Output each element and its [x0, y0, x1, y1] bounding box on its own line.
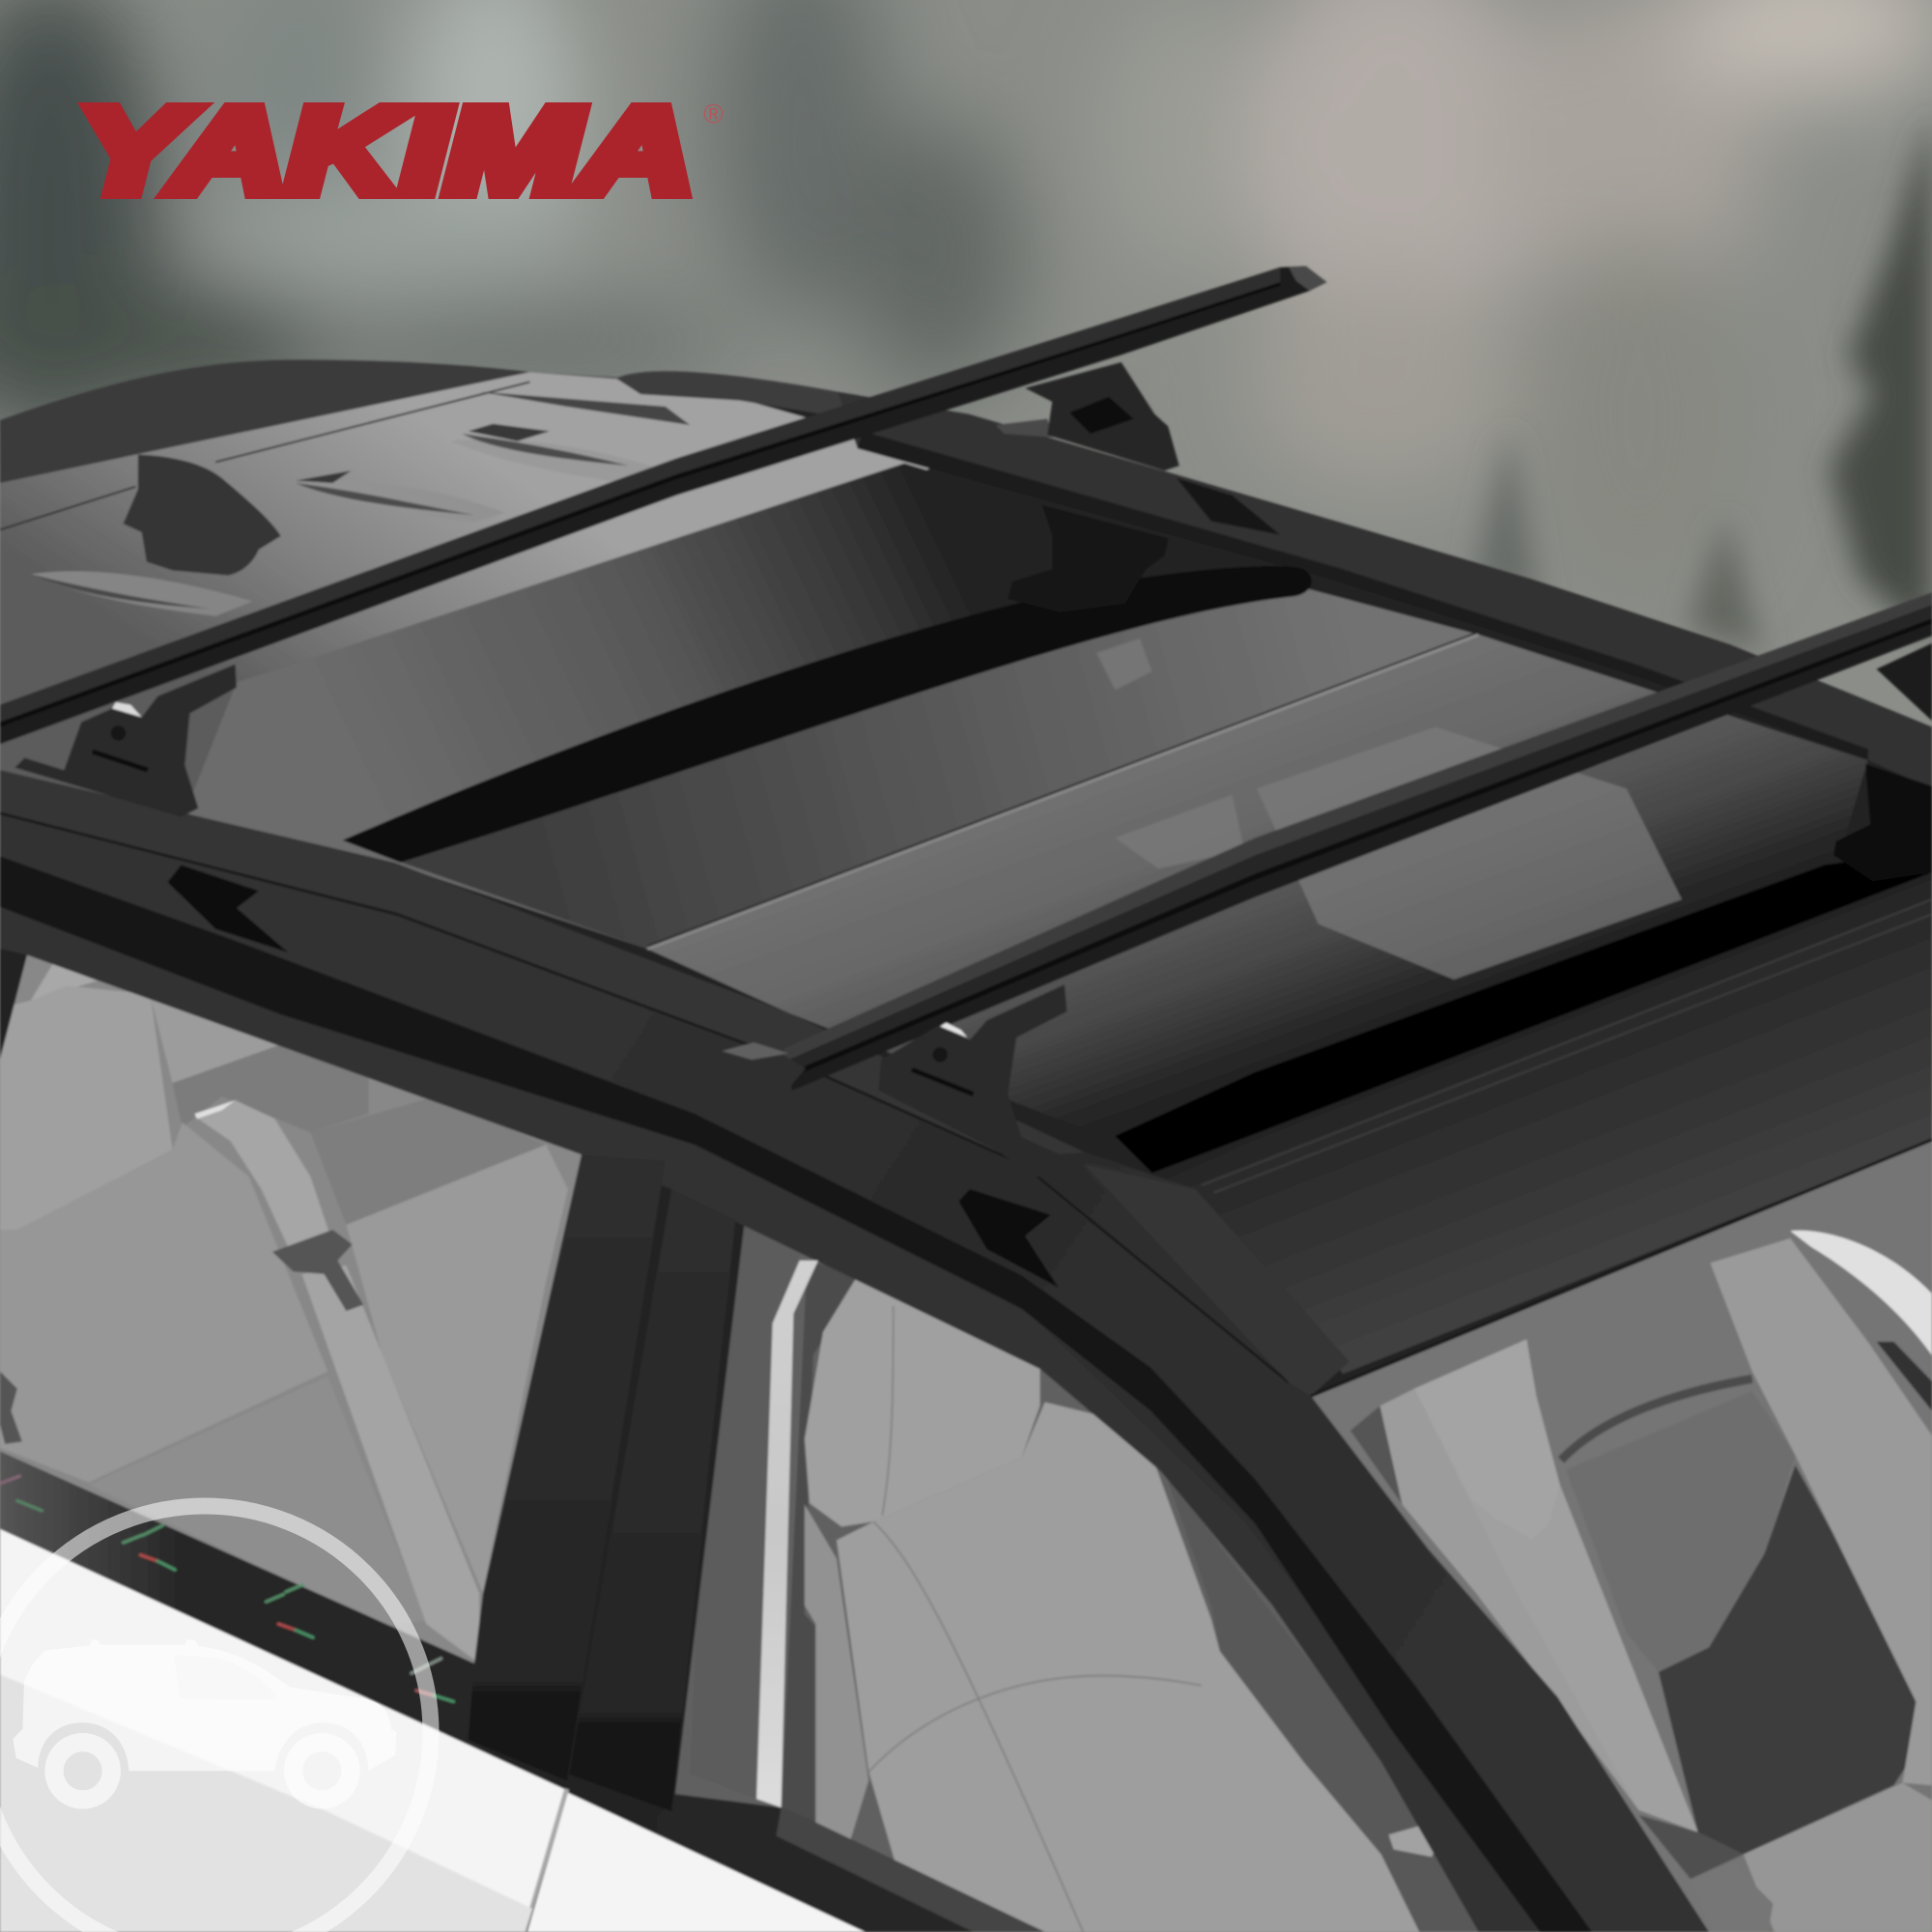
- b pillar rear: [469, 1154, 666, 1780]
- white car body front door: [527, 1793, 865, 1932]
- brand logo: ®: [703, 99, 724, 129]
- brand logo: YAKIMA: [77, 84, 694, 218]
- body crease shade: [0, 1674, 532, 1932]
- sill light band: [777, 1807, 1045, 1932]
- side reflection rear: [167, 865, 288, 952]
- rail highlight: [0, 770, 1084, 1158]
- right far tower: [1877, 643, 1932, 721]
- roof seam line: [0, 382, 529, 529]
- sill colour specks: [0, 1476, 453, 1701]
- front door white strip: [756, 1261, 818, 1807]
- crossbar rear: [0, 267, 1327, 744]
- roof reflection streaks: [31, 392, 690, 616]
- front roof panel: [1164, 880, 1932, 1374]
- lower trim band: [0, 907, 1543, 1932]
- rear window: [0, 955, 582, 1663]
- roof side panel: [1084, 1164, 1350, 1396]
- far side roof rail: [838, 392, 1932, 788]
- far rail reflection: [1177, 478, 1280, 535]
- glass roof rear panel: [185, 464, 1479, 949]
- glass roof lower rear panel: [394, 589, 1479, 949]
- crossbar front end cap: [717, 1042, 806, 1094]
- near left tower: [14, 665, 237, 817]
- rear door sill: [0, 1452, 562, 1789]
- front window: [675, 1226, 1479, 1932]
- door gap: [524, 1789, 567, 1932]
- panel divider dark line: [647, 632, 1479, 947]
- front sill: [657, 1794, 1045, 1932]
- front seats: [782, 1264, 1476, 1932]
- crossbar front: [783, 593, 1932, 1091]
- rear seats: [0, 963, 568, 1663]
- shark fin antenna: [124, 455, 281, 576]
- far lower tower reflection: [1008, 505, 1168, 612]
- vehicle type badge: [0, 1506, 431, 1932]
- interior reflections in glass: [1096, 639, 1682, 980]
- roof side and pillar: [0, 770, 1709, 1932]
- dark trim band: [0, 856, 1592, 1932]
- rear spoiler: [0, 359, 529, 493]
- roof glossy surface: [0, 372, 949, 813]
- side reflection front: [958, 1189, 1059, 1288]
- far rail shadow: [858, 431, 1868, 760]
- windshield interior: [1350, 1231, 1932, 1932]
- icon: SUV silhouette: [13, 1639, 397, 1800]
- far top tower: [996, 362, 1179, 470]
- white car body rear door: [0, 1529, 564, 1932]
- black roof stripe front: [1115, 850, 1932, 1173]
- windshield top line: [1311, 1140, 1932, 1396]
- front panel seams: [1202, 899, 1932, 1193]
- windshield: [1311, 1140, 1932, 1932]
- near front tower: [878, 984, 1068, 1178]
- right far tower reflection: [1833, 764, 1932, 881]
- b pillar front: [569, 1189, 735, 1811]
- black roof stripe rear: [343, 566, 1312, 863]
- far side spoiler: [616, 371, 887, 425]
- badge ring: [0, 1506, 431, 1932]
- rail lower line: [0, 813, 1289, 1382]
- panel divider: [647, 635, 1479, 949]
- glass roof middle panel: [647, 635, 1868, 1140]
